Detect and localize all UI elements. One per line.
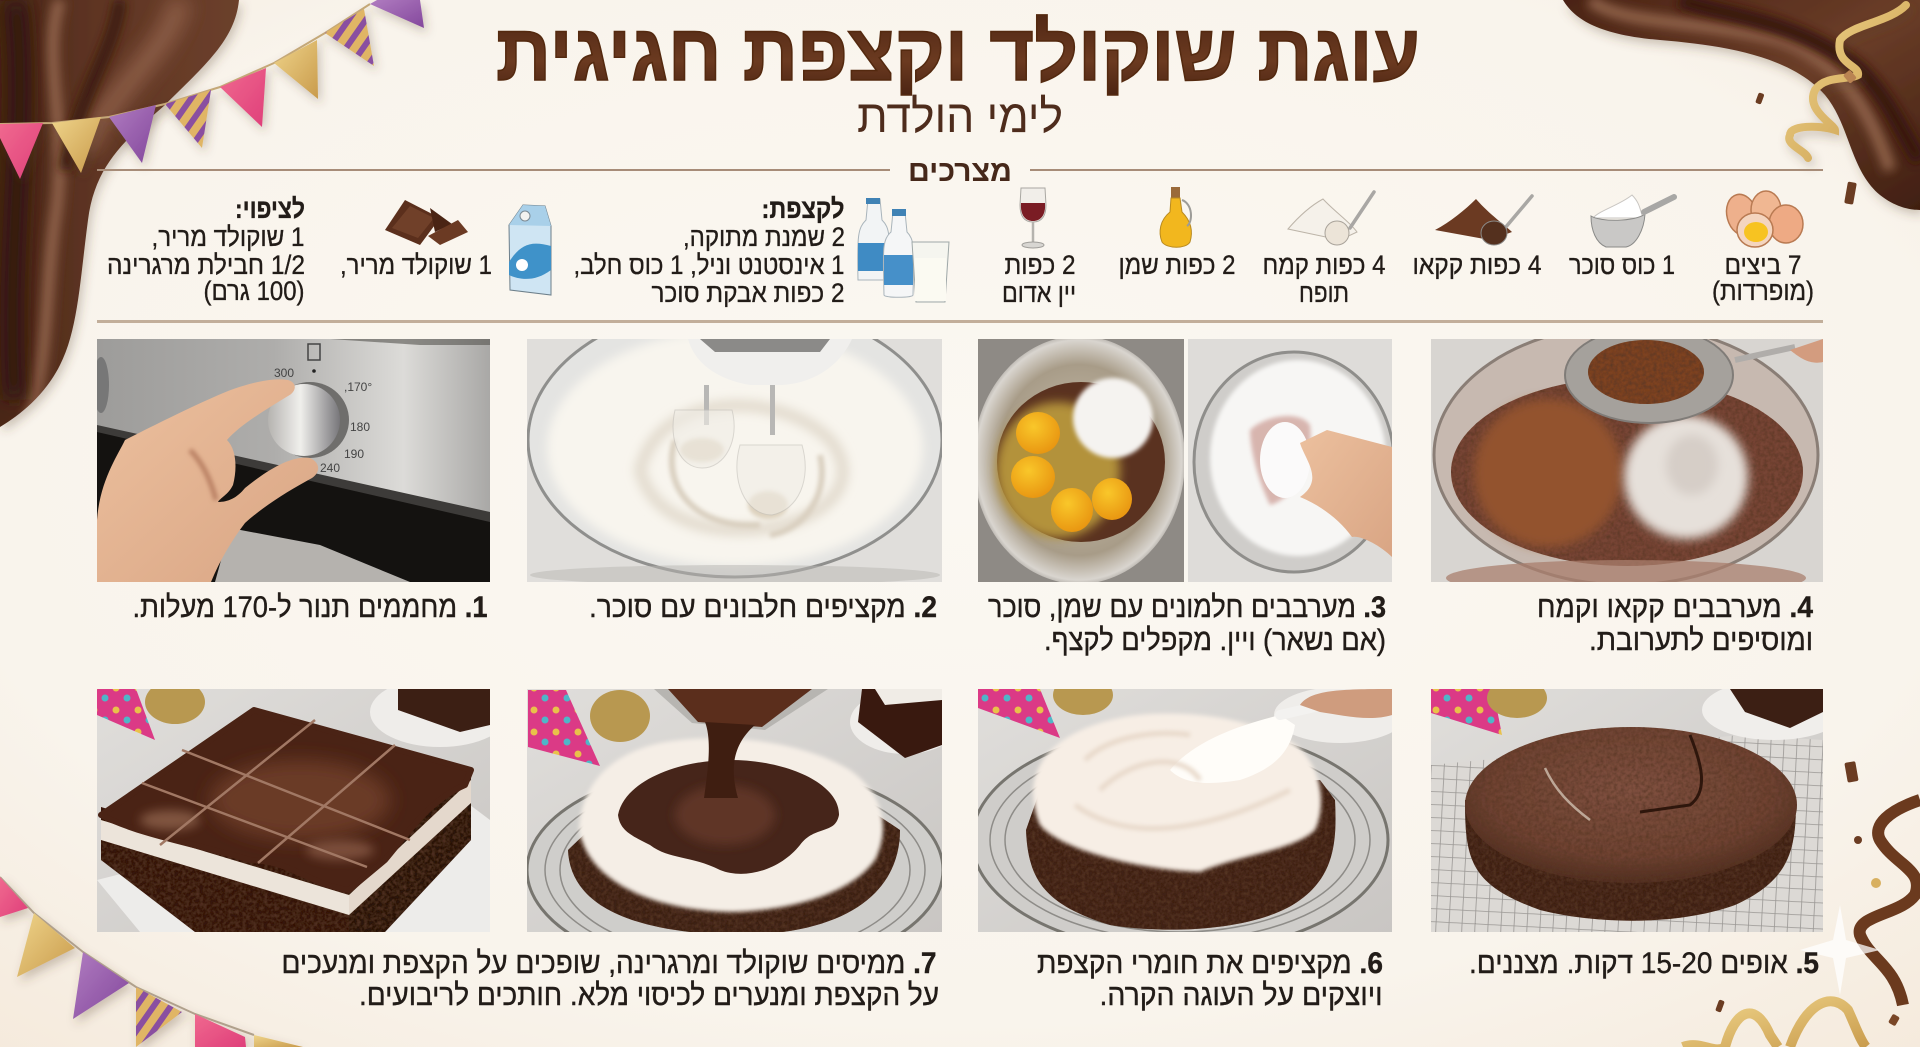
- label: 2 tbsp oil: 2 כפות שמן: [1118, 250, 1236, 280]
- ingredient: whipping cream group: [574, 194, 949, 308]
- title: עוגת שוקולד וקצפת חגיגית: [496, 8, 1420, 97]
- icon: chocolate pieces: [385, 200, 468, 245]
- ingredient: flour: [1262, 192, 1386, 308]
- text: for the cream: [574, 194, 845, 308]
- photo: step 5 baked cake: [1431, 678, 1846, 932]
- label: red wine: יין אדום: [1002, 278, 1076, 308]
- ingredients divider top: [97, 169, 1823, 171]
- icon: flour and spoon: [1288, 192, 1374, 245]
- line 1: 7. ממיסים שוקולד ומרגרינה, שופכים על הקצפת ומנעכים: [282, 947, 936, 980]
- heading: for glaze: לציפוי:: [235, 194, 305, 224]
- line: cream: 2 שמנת מתוקה,: [683, 222, 845, 252]
- ingredient: eggs: [1712, 191, 1814, 306]
- icon: milk bottles and glass: [858, 198, 949, 302]
- confetti top-right: [1755, 70, 1857, 205]
- bunting top-left: [0, 0, 424, 179]
- photo: step 1 oven knob: 180: [350, 420, 370, 434]
- line: margarine: 1/2 חבילת מרגרינה: [107, 250, 305, 280]
- line 2: ויוצקים על העוגה הקרה.: [1100, 979, 1382, 1012]
- ingredient: oil: [1118, 187, 1236, 280]
- label: 1 cup sugar: 1 כוס סוכר: [1569, 250, 1675, 280]
- label: separated: (מופרדות): [1712, 276, 1814, 306]
- ingredients divider bottom: [97, 320, 1823, 323]
- line 1: 3. מערבבים חלמונים עם שמן, סוכר: [988, 591, 1386, 624]
- chocolate wave top-right: [1560, 0, 1920, 215]
- label: 2 tbsp: 2 כפות: [1004, 250, 1076, 280]
- step 2 caption: 2. מקציפים חלבונים עם סוכר.: [589, 591, 937, 624]
- icon: eggs: [1722, 191, 1803, 247]
- label: 7 eggs: 7 ביצים: [1724, 250, 1802, 280]
- step 4 caption: [1537, 591, 1813, 657]
- ribbons and confetti bottom-right: [1683, 761, 1920, 1047]
- line 1: 6. מקציפים את חומרי הקצפת: [1037, 947, 1383, 980]
- step 5 caption: 5. אופים 15-20 דקות. מצננים.: [1469, 947, 1819, 980]
- icon: cocoa and spoon: [1435, 196, 1532, 245]
- ingredient: dark chocolate: [340, 200, 492, 280]
- line: dark chocolate: 1 שוקולד מריר,: [152, 222, 304, 252]
- step 6 caption: [1037, 947, 1383, 1012]
- photo: step 1 oven knob: [93, 339, 490, 582]
- photo: step 6 spreading cream: [978, 689, 1392, 932]
- heading: for cream: לקצפת:: [762, 194, 844, 224]
- photo: step 1 oven knob: 240: [320, 461, 340, 475]
- label: 4 tbsp flour: 4 כפות קמח: [1262, 250, 1386, 280]
- line 2: (אם נשאר) ויין. מקפלים לקצף.: [1044, 624, 1386, 657]
- subtitle: לימי הולדת: [857, 90, 1063, 142]
- label: self-rising: תופח: [1299, 278, 1349, 308]
- photo: step 8 finished squares: [97, 677, 510, 932]
- icon: oil bottle: [1160, 187, 1191, 247]
- bunting bottom-left: [0, 877, 303, 1047]
- chocolate curtain top-left: [0, 0, 250, 430]
- icon: wine glass: [1020, 188, 1046, 248]
- step 3 caption: [988, 591, 1386, 657]
- photo: step 7 pouring glaze: [527, 689, 942, 932]
- ingredient: cocoa: [1412, 196, 1542, 280]
- step 7 caption: [282, 947, 939, 1012]
- label: dark chocolate: 1 שוקולד מריר,: [340, 250, 492, 280]
- line 1: 4. מערבבים קקאו וקמח: [1537, 591, 1813, 624]
- ingredient: milk carton icon: [509, 205, 551, 295]
- line: 100 grams: (100 גרם): [204, 276, 304, 306]
- photo: step 3 folding whites: [1188, 339, 1394, 582]
- icon: sugar cup: [1591, 195, 1674, 247]
- ingredient: sugar: [1569, 195, 1675, 280]
- ingredients heading: מצרכים: [908, 155, 1012, 188]
- photo: step 1 oven knob: 300: [274, 366, 294, 380]
- ingredient: wine: [1002, 188, 1076, 308]
- step 1 caption: 1. מחממים תנור ל-170 מעלות.: [132, 591, 487, 624]
- line: powdered sugar: 2 כפות אבקת סוכר: [652, 278, 844, 308]
- text: for the glaze: [107, 194, 305, 306]
- photo: step 1 oven knob: ,170°: [344, 380, 372, 394]
- line 2: על הקצפת ומנערים לכיסוי מלא. חותכים לריבועים.: [359, 979, 939, 1012]
- photo: step 1 oven knob: 190: [344, 447, 364, 461]
- photo: step 2 whipped whites: [527, 339, 942, 582]
- line: vanilla, milk: 1 אינסטנט וניל, 1 כוס חלב,: [574, 250, 844, 280]
- photo: step 4 cocoa and flour: [1431, 339, 1823, 582]
- gold ribbon top-right: [1789, 5, 1906, 158]
- photo: step 3 yolks and oil bowl: [973, 336, 1185, 584]
- line 2: ומוסיפים לתערובת.: [1589, 624, 1813, 657]
- label: 4 tbsp cocoa: 4 כפות קקאו: [1412, 250, 1542, 280]
